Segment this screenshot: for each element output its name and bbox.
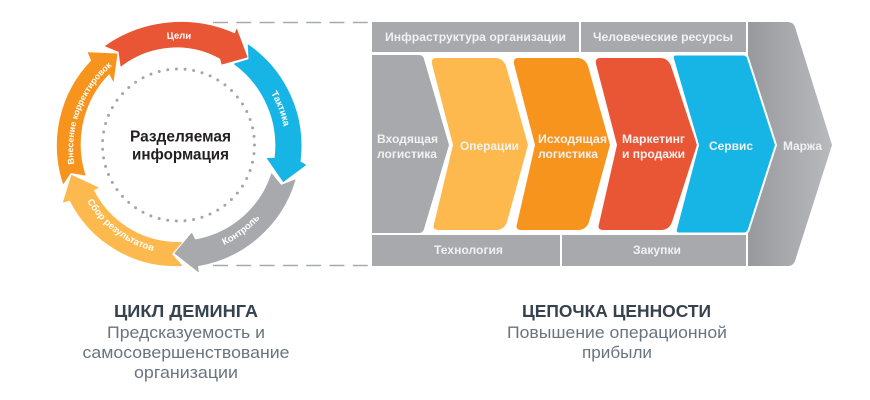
arrow: Тактика [234, 44, 306, 182]
arrow: Цели [105, 22, 248, 66]
caption: Deming cycle: Предсказуемость и [107, 323, 265, 342]
support: procurement: Закупки [633, 245, 681, 257]
caption: value chain [507, 301, 727, 362]
value chain [372, 22, 832, 266]
support: technology [372, 235, 560, 266]
arrow: Внесение корректировок: Внесение корректировок [68, 62, 112, 164]
chevron: inbound logistics [372, 55, 449, 233]
support: technology: Технология [434, 245, 503, 257]
chevron: service [673, 54, 776, 234]
support: procurement [562, 235, 746, 266]
arrow: Сбор результатов [63, 175, 182, 266]
chevron: marketing and sales: и продажи [622, 149, 685, 161]
chevron: marketing and sales: Маркетинг [622, 134, 685, 146]
chevron: operations [432, 58, 528, 230]
caption: value chain: Повышение операционной [507, 323, 727, 342]
caption: Deming cycle [82, 301, 290, 382]
arrow: Контроль [174, 174, 296, 272]
chevron: inbound logistics: Входящая [377, 134, 438, 146]
margin chevron [748, 22, 832, 266]
caption: Deming cycle: организации [134, 363, 238, 382]
support: infrastructure [372, 22, 579, 52]
chevron: inbound logistics: логистика [377, 149, 438, 161]
caption: Deming cycle: ЦИКЛ ДЕМИНГА [114, 301, 258, 321]
arrow: Сбор результатов: Сбор результатов [88, 199, 154, 251]
center label: Разделяемая [130, 128, 231, 146]
center label [130, 128, 231, 164]
chevron: operations: Операции [460, 141, 519, 153]
arrow: Контроль: Контроль [222, 217, 259, 245]
support: infrastructure: Инфраструктура организации [385, 32, 566, 44]
chevron: outbound logistics [514, 58, 610, 230]
caption: value chain: прибыли [582, 343, 652, 362]
chevron: service: Сервис [709, 141, 754, 153]
deming cycle ring [56, 22, 306, 272]
caption: value chain: ЦЕПОЧКА ЦЕННОСТИ [522, 301, 711, 321]
connector dashes [213, 22, 370, 266]
dotted inner circle [102, 69, 254, 221]
chevron: outbound logistics: логистика [538, 149, 599, 161]
center label: информация [132, 146, 229, 164]
arrow: Цели: Цели [167, 32, 191, 41]
support: HR: Человеческие ресурсы [593, 32, 733, 44]
chevron: marketing and sales [596, 58, 697, 230]
margin chevron: Маржа [783, 141, 823, 153]
chevron: outbound logistics: Исходящая [538, 134, 607, 146]
support: HR [581, 22, 746, 52]
arrow: Внесение корректировок [56, 52, 118, 184]
arrow: Тактика: Тактика [272, 90, 288, 127]
caption: Deming cycle: самосовершенствование [82, 343, 290, 362]
